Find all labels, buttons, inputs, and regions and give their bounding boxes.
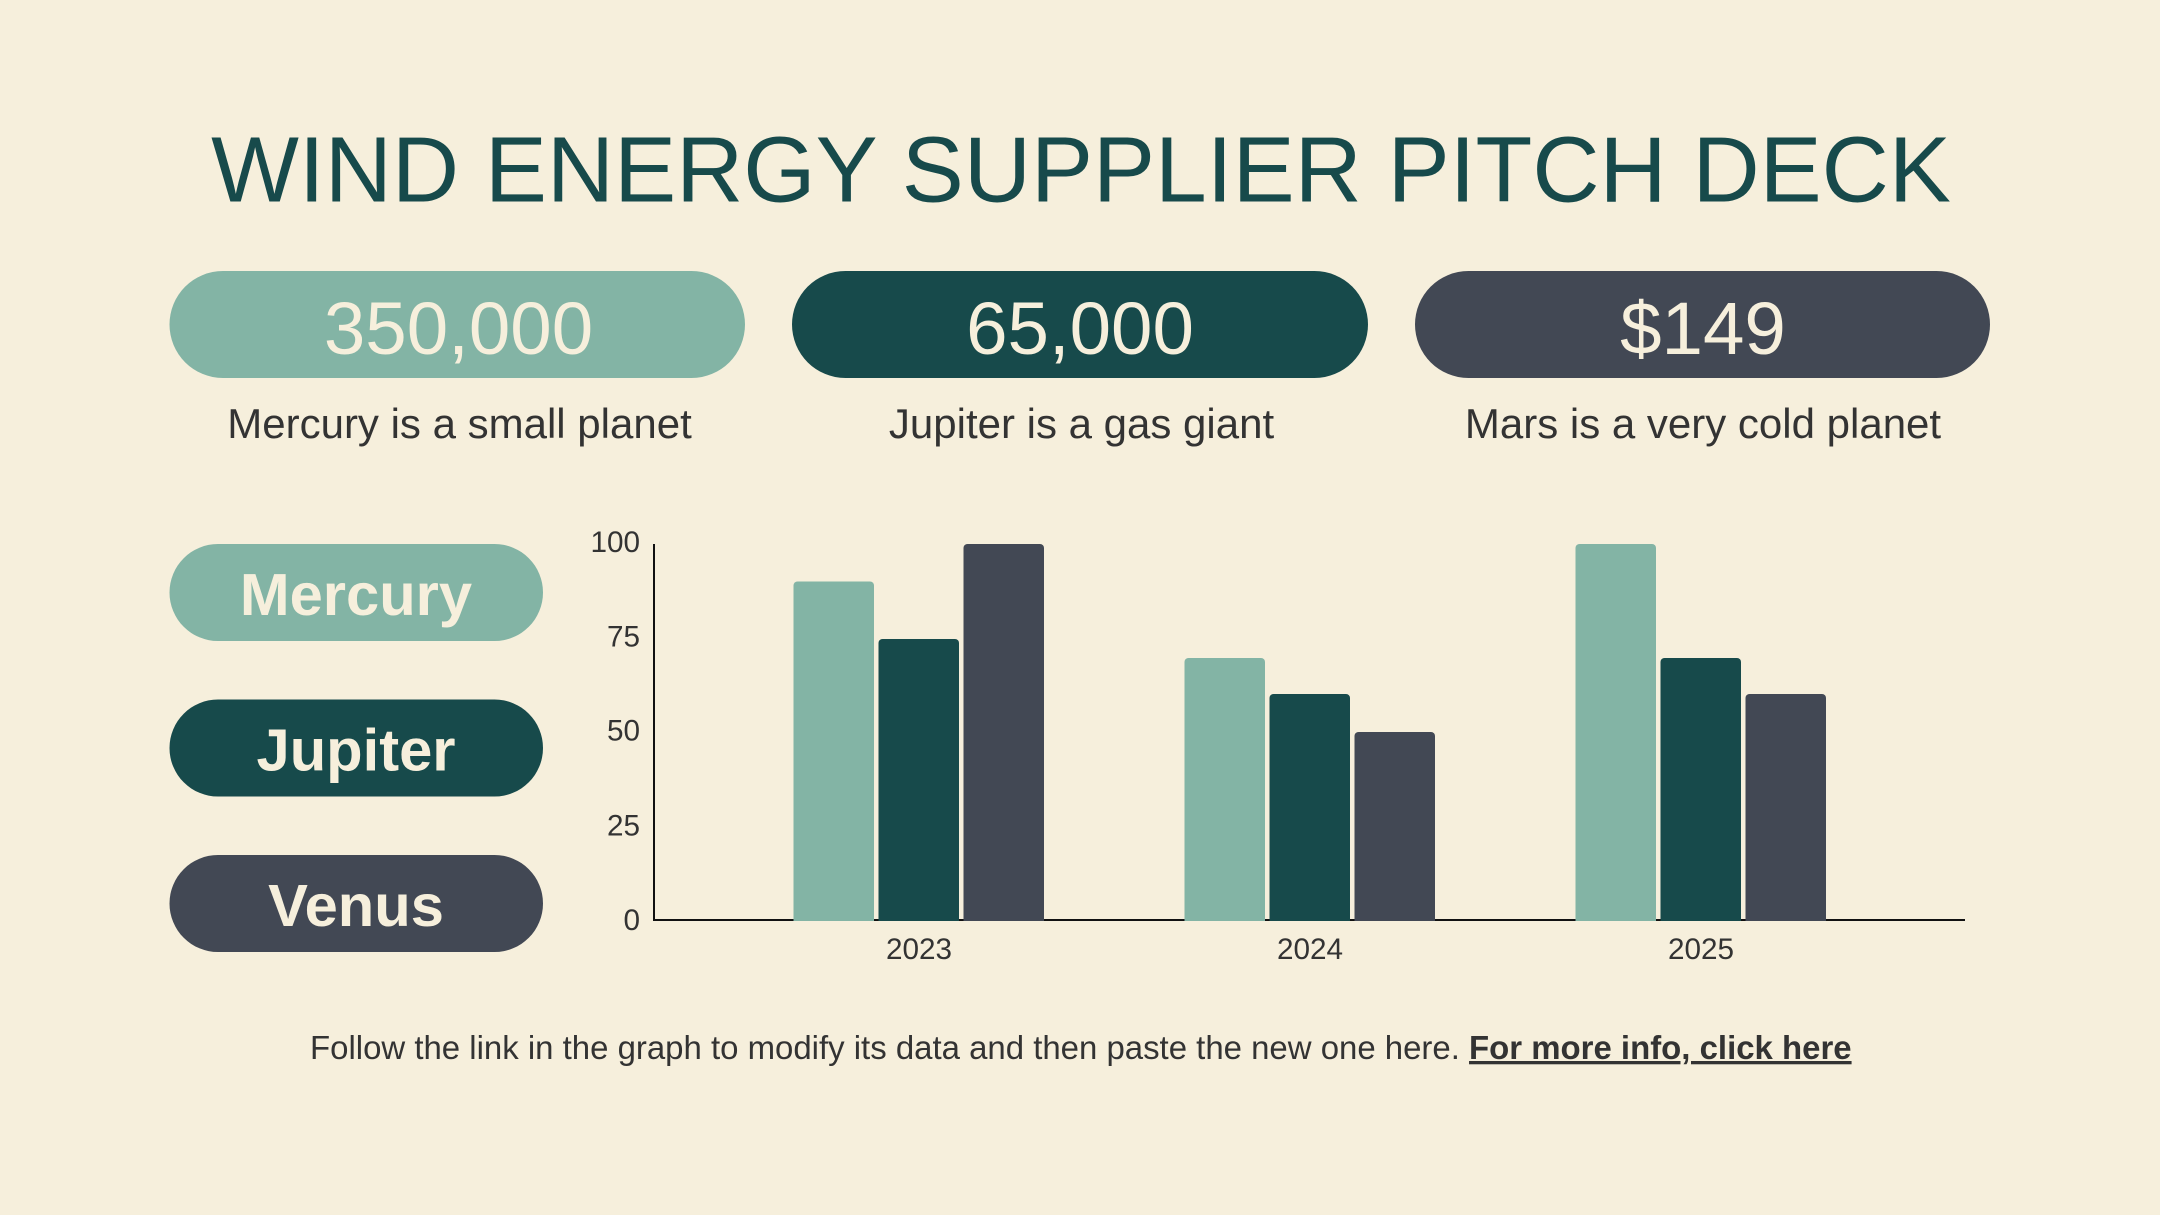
stat: $149: Mars is a very cold planet — [1465, 400, 1941, 447]
stat: 350,000: 350,000 — [324, 287, 593, 370]
legend pill: Jupiter: Jupiter — [256, 716, 456, 784]
bar chart — [590, 526, 1965, 966]
stat: 350,000 — [170, 271, 745, 447]
y axis labels: 75 — [607, 620, 640, 654]
stat: $149: $149 — [1620, 287, 1786, 370]
x axis labels — [886, 933, 1734, 966]
stat: 350,000: Mercury is a small planet — [227, 400, 692, 447]
axes — [654, 544, 1965, 920]
legend pill: Mercury — [170, 544, 543, 641]
footer note: Follow the link in the graph to modify its data and then paste the new one here. For more info, click here — [310, 1029, 1852, 1066]
bars 2024 — [1184, 658, 1435, 921]
stat: 65,000: 65,000 — [966, 287, 1194, 370]
stat: 65,000: Jupiter is a gas giant — [889, 400, 1274, 447]
x axis labels: 2023 — [886, 933, 952, 966]
stat: $149 — [1415, 271, 1990, 447]
legend pill: Jupiter — [170, 700, 543, 796]
stat: 65,000 — [792, 271, 1368, 447]
y axis labels: 25 — [607, 810, 640, 842]
legend pill: Mercury: Mercury — [240, 561, 472, 628]
x axis labels: 2024 — [1277, 933, 1343, 966]
bars 2025 — [1576, 544, 1826, 921]
title: WIND ENERGY SUPPLIER PITCH DECK — [211, 118, 1951, 222]
y axis labels: 0 — [623, 904, 640, 937]
y axis labels: 50 — [607, 714, 640, 748]
legend pill: Venus — [170, 855, 543, 952]
y axis labels: 100 — [590, 526, 640, 559]
y axis labels — [590, 526, 640, 937]
bars 2023 — [794, 544, 1044, 921]
x axis labels: 2025 — [1668, 933, 1734, 966]
legend pill: Venus: Venus — [268, 872, 444, 939]
